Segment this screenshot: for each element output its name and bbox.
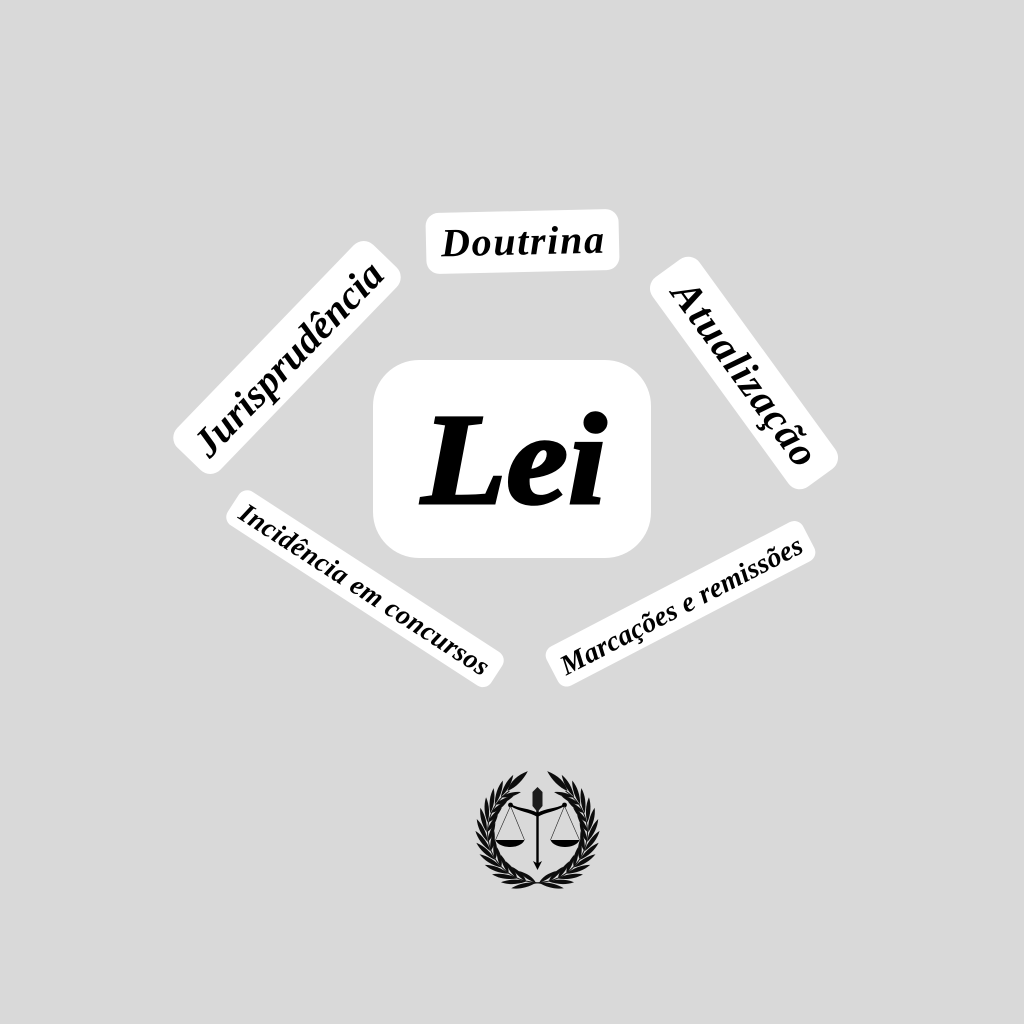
panel: Marcações e remissões: [542, 518, 819, 690]
panel: Lei: [373, 360, 651, 558]
panel: Atualização: [644, 251, 844, 495]
label: Incidência em concursos: Incidência em concursos: [233, 496, 496, 682]
arrow fletching: [532, 787, 542, 812]
panel: Jurisprudência: [167, 235, 407, 480]
icon: scales and arrow inside laurel wreath: [475, 771, 600, 893]
scale beam: [510, 804, 564, 817]
heading: Lei: Lei: [420, 388, 606, 532]
right pan: [550, 803, 580, 847]
left pan: [496, 803, 524, 847]
label: Jurisprudência: Jurisprudência: [183, 252, 392, 466]
laurel right: [530, 771, 600, 893]
label: Doutrina: Doutrina: [439, 217, 604, 265]
arrow shaft: [536, 806, 539, 864]
label: Marcações e remissões: Marcações e remissões: [554, 530, 808, 682]
panel: Doutrina: [425, 209, 620, 274]
arrow head: [533, 861, 542, 870]
label: Atualização: Atualização: [661, 269, 828, 475]
panel: Incidência em concursos: [222, 486, 508, 691]
laurel left: [475, 771, 546, 893]
